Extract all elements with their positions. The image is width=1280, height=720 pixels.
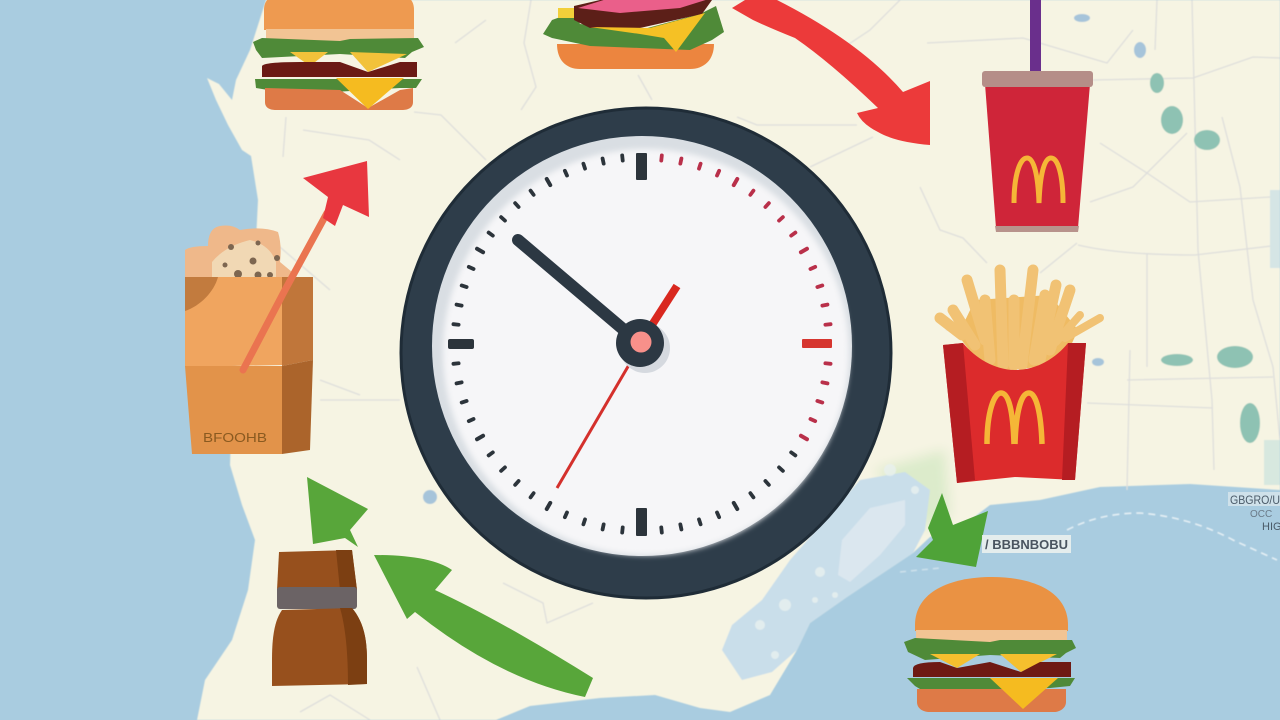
logo: golden arches [987,393,1042,444]
clock: dark bezel [401,108,891,598]
map: lakes [1150,73,1260,443]
clock: center hub [616,319,670,373]
cup body [985,84,1090,228]
label: map corner text [1228,492,1280,533]
box top [185,277,282,367]
arrow: green under fries [916,493,988,567]
clock: hour marks [448,153,832,536]
logo: golden arches [1014,158,1063,203]
arrow: short green [307,477,368,547]
arrow: long green [374,555,593,697]
arrow: red up from box [243,161,369,370]
icon: kraft takeaway box [185,226,313,454]
arrow: red top right [732,0,930,145]
map: wetland blue shoreline [722,472,930,680]
map: wetland green tint [875,450,950,530]
clock [401,108,891,598]
cup lid [982,71,1093,87]
cup base [995,226,1079,232]
icon: red McDonald's cup [982,0,1093,232]
clock: second hand [557,286,677,488]
box label: BFOOHB [203,430,267,445]
map: dashed ferry route [1067,513,1277,560]
icon: burger bottom right [904,577,1076,712]
icon: brown bottle [272,550,367,686]
icon: burger top left [253,0,424,110]
icon: burger top centre [543,0,724,69]
food [185,226,292,280]
label: map corner text: OCC [1250,509,1272,520]
clock: white face [443,149,849,555]
label: map place name: / BBBNBOBU [985,537,1068,552]
map: dashed ferry route left [900,568,940,572]
clock: minute ticks dark [451,153,798,535]
straw [1030,0,1041,71]
icon: fries in red box [940,270,1100,483]
map: blue ponds [423,14,1280,504]
clock: inner rim [432,136,852,556]
map: pale lagoon [838,500,905,582]
fries box [943,343,1086,483]
box bottom [185,366,282,454]
fries [940,270,1100,372]
clock: hour hand [518,240,630,335]
clock: minute ticks red [659,153,833,442]
